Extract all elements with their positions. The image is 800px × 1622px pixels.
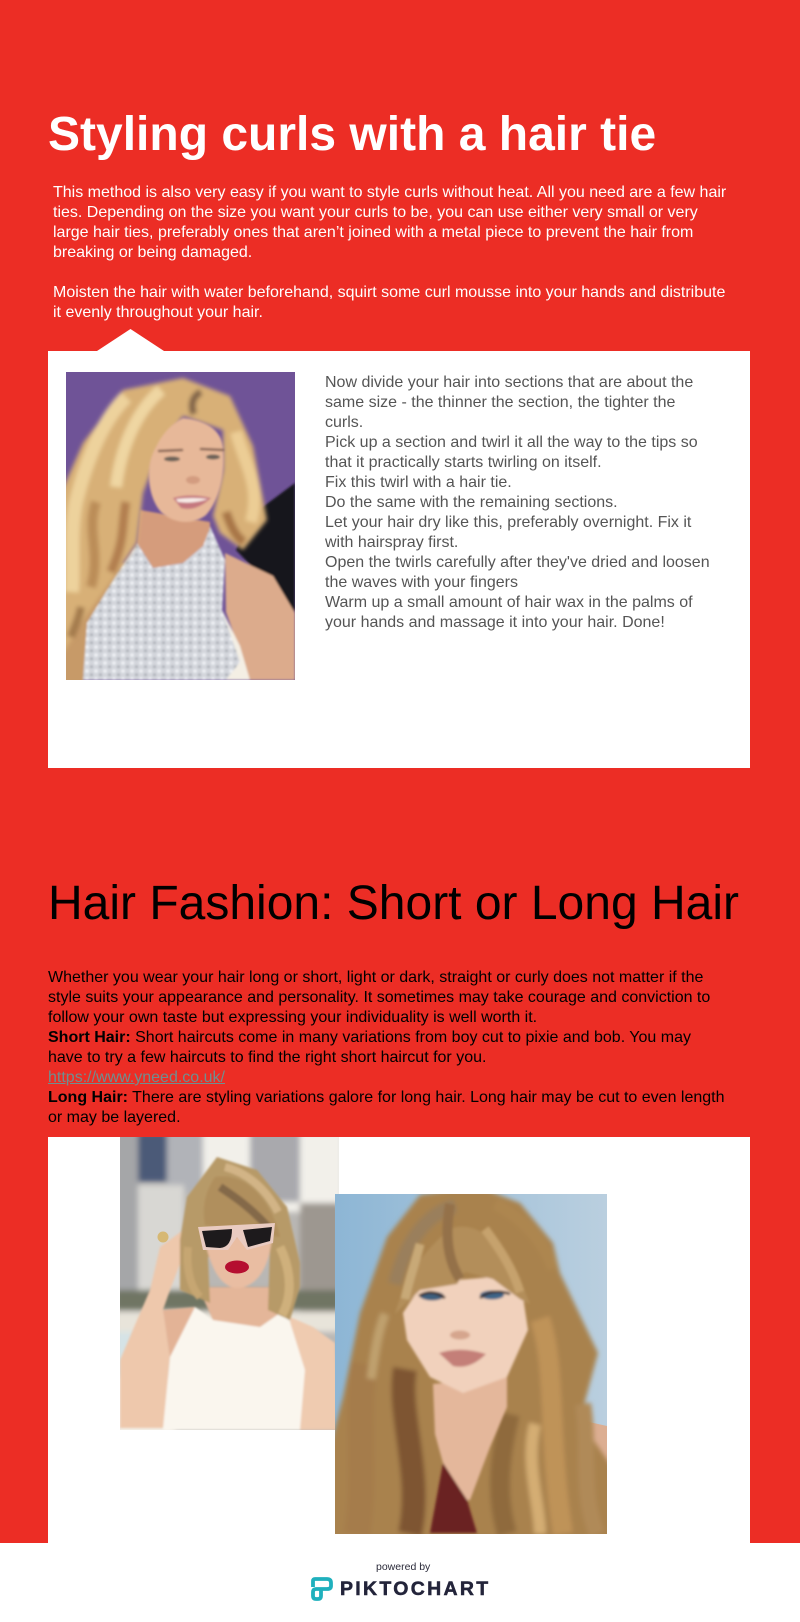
intro text block: it evenly throughout your hair. — [53, 304, 263, 321]
callout pointer triangle — [97, 329, 164, 351]
powered by text: powered by — [376, 1561, 430, 1573]
panel: hair photos — [48, 1137, 750, 1557]
steps text block: same size - the thinner the section, the tighter the — [325, 394, 675, 411]
footer band — [0, 1543, 800, 1622]
body text block: hair fashion: Whether you wear your hair long or short, light or dark, straight or curly does not matter if the — [48, 969, 703, 986]
steps text block: your hands and massage it into your hair. Done! — [325, 614, 665, 631]
steps text block: Fix this twirl with a hair tie. — [325, 474, 512, 491]
title: hair fashion: Hair Fashion: Short or Long Hair — [48, 877, 739, 930]
steps text block: that it practically starts twirling on itself. — [325, 454, 602, 471]
intro text block: Moisten the hair with water beforehand, squirt some curl mousse into your hands and distribute — [53, 284, 725, 301]
body text block: hair fashion: Long Hair: There are styling variations galore for long hair. Long hair may be cut to even length — [48, 1089, 724, 1106]
panel: curl steps — [48, 351, 750, 768]
body text block: hair fashion: https://www.yneed.co.uk/ — [48, 1069, 225, 1086]
icon: piktochart logo — [311, 1577, 333, 1601]
steps text block: Warm up a small amount of hair wax in the palms of — [325, 594, 693, 611]
photo: short hair with sunglasses — [120, 1137, 339, 1430]
steps text block: Open the twirls carefully after they've dried and loosen — [325, 554, 710, 571]
photo: long hair with bangs — [335, 1194, 607, 1534]
intro text block: large hair ties, preferably ones that aren’t joined with a metal piece to prevent the hair from — [53, 224, 693, 241]
body text block: hair fashion: Short Hair: Short haircuts come in many variations from boy cut to pixie and bob. You may — [48, 1029, 691, 1046]
steps text block: with hairspray first. — [325, 534, 458, 551]
body text block: hair fashion: or may be layered. — [48, 1109, 181, 1126]
steps text block: Let your hair dry like this, preferably overnight. Fix it — [325, 514, 691, 531]
body text block: hair fashion — [48, 969, 724, 1126]
steps text block: Now divide your hair into sections that are about the — [325, 374, 693, 391]
body text block: hair fashion: style suits your appearance and personality. It sometimes may take courage and conviction to — [48, 989, 710, 1006]
intro text block — [53, 184, 726, 321]
steps text block: curls. — [325, 414, 363, 431]
steps text block: Do the same with the remaining sections. — [325, 494, 618, 511]
piktochart wordmark: PIKTOCHART — [340, 1578, 490, 1600]
title: styling curls: Styling curls with a hair tie — [48, 108, 656, 161]
steps text block: the waves with your fingers — [325, 574, 518, 591]
steps text block: Pick up a section and twirl it all the way to the tips so — [325, 434, 698, 451]
intro text block: ties. Depending on the size you want your curls to be, you can use either very small or very — [53, 204, 698, 221]
steps text block — [325, 374, 710, 631]
intro text block: breaking or being damaged. — [53, 244, 252, 261]
body text block: hair fashion: follow your own taste but expressing your individuality is well worth it. — [48, 1009, 537, 1026]
photo: woman with blonde curls — [66, 372, 295, 680]
body text block: hair fashion: have to try a few haircuts to find the right short haircut for you. — [48, 1049, 486, 1066]
intro text block: This method is also very easy if you want to style curls without heat. All you need are a few hair — [53, 184, 726, 201]
